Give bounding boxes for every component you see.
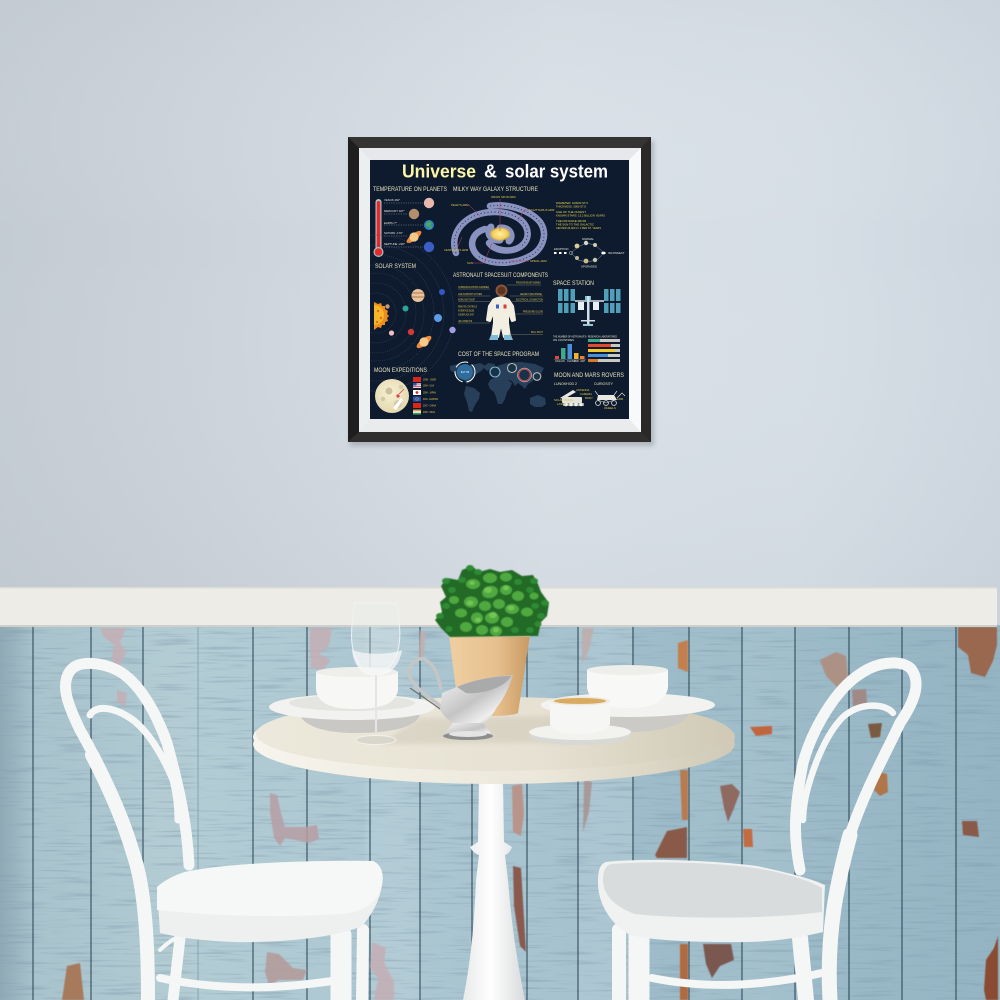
black frame (348, 137, 651, 442)
right callouts: BOLL BOOT (531, 330, 543, 334)
wood plank wainscot (0, 625, 1000, 1000)
heading: milky way: MILKY WAY GALAXY STRUCTURE (453, 186, 538, 193)
chair seat (157, 861, 383, 942)
rover callouts: SOLAR PANEL (554, 398, 574, 402)
rover names (554, 381, 613, 386)
flags and years: 2003 - EUROPE (423, 397, 438, 401)
galaxy callouts: SUN (467, 261, 473, 265)
flags and years: 1959 - USSR (423, 378, 436, 382)
panel: cost of the space program (450, 351, 546, 412)
chair legs and stretcher (619, 930, 822, 1000)
icon: astronaut (487, 284, 515, 340)
left callouts (458, 285, 490, 323)
panel: astronaut spacesuit components (453, 272, 548, 340)
white chair rail (0, 587, 997, 627)
flags and years: 2007 - CHINA (423, 404, 436, 408)
bar chart: UK (561, 359, 565, 363)
panel: moon expeditions (374, 367, 438, 415)
galaxy callouts: CENTAURUS ARM (444, 248, 469, 252)
rover names: CURIOSITY (594, 381, 613, 386)
icon: sun (374, 302, 389, 330)
flags and years (413, 377, 438, 415)
left callouts: LIFE SUPPORT SYSTEM (458, 292, 482, 296)
silver gravy boat (408, 659, 513, 740)
chair legs and stretcher (160, 930, 363, 1000)
heading: cost: COST OF THE SPACE PROGRAM (458, 351, 539, 358)
rover callouts: ANTENNA (576, 388, 589, 392)
rover callouts: LASER (557, 402, 566, 406)
green plant (435, 565, 549, 637)
horizontal bars (588, 339, 620, 362)
world map (450, 362, 546, 412)
paint peel patches (62, 627, 998, 1000)
table pedestal (463, 780, 525, 1000)
chart caption: THE NUMBER OF ASTRONAUTS / RESEARCH LABORATORIES (553, 334, 617, 338)
panel: astronauts bar chart (553, 334, 620, 363)
wine glass (352, 603, 402, 744)
panel: space station (553, 280, 620, 326)
rover callouts: CAMERA (580, 392, 592, 396)
title: solar system (505, 162, 608, 182)
left callouts: COMMUNICATIONS CARRIER (458, 285, 489, 289)
left chair (65, 663, 383, 1000)
rover callouts: BODY (585, 396, 593, 400)
chart caption (553, 336, 617, 341)
plant pot (449, 635, 530, 716)
left callouts: WORKLOAD TAUNET (458, 298, 475, 302)
rover names: LUNOKHOD 2 (554, 381, 578, 386)
heading: moon expeditions: MOON EXPEDITIONS (374, 367, 427, 374)
temperature labels (384, 198, 423, 247)
poster background (370, 160, 629, 419)
chart: spiral galaxy (454, 205, 544, 263)
title (403, 164, 607, 182)
title: & (484, 162, 497, 182)
text block: galaxy facts: KNOWN STARS: 13.2 BILLION YEARS (556, 214, 605, 218)
rover callouts (554, 388, 624, 410)
left callouts: INTERFACE ELBE (458, 308, 474, 312)
left callouts: REMOTE CONTROLS (458, 304, 477, 308)
left callouts: GUIDEPLACE UNIT (458, 312, 474, 316)
bar chart: USA (555, 359, 561, 363)
right plate and bowl (541, 665, 715, 732)
flags and years: 1990 - JAPAN (423, 390, 436, 394)
orbits (370, 234, 454, 392)
text block: galaxy facts: AGE OF THE OLDEST (556, 210, 586, 214)
icon: space station (558, 289, 620, 326)
diagram: galaxy evolution cycle: ERUPTION (554, 247, 568, 251)
text block: galaxy facts: THICKNESS: 3000 ST.S (556, 204, 586, 208)
galaxy callouts (444, 195, 555, 265)
right callouts: PRESSURE GLOVE (523, 310, 543, 314)
heading: rovers: MOON AND MARS ROVERS (554, 372, 624, 379)
left plate and bowl (269, 667, 435, 733)
diagram: galaxy evolution cycle: UPGRADED (581, 264, 597, 268)
white mat (359, 148, 641, 432)
temperature labels: NEPTUNE -218° (384, 242, 405, 246)
framed poster (348, 137, 656, 448)
right callouts: HELMET (BACKSIDE) (520, 292, 542, 296)
right callouts: PRESSURE HELMET ASSEMBLY (516, 280, 541, 284)
panel: moon and mars rovers (554, 372, 625, 410)
cost rings: $17.7B (461, 370, 469, 374)
flags and years: 2008 - INDIA (423, 410, 435, 414)
right callouts: ELECTRICAL CONNECTION (516, 298, 543, 302)
panel: solar system (370, 234, 456, 392)
title: Universe (402, 162, 476, 182)
bar chart: CHINA (567, 359, 576, 363)
galaxy callouts: SPIRAL ARM (530, 259, 547, 263)
coffee cup and saucer (529, 696, 631, 745)
rover callouts: WHEELS (604, 406, 616, 410)
diagram: galaxy evolution cycle: NORMAL (582, 237, 594, 241)
bar chart: IND (574, 359, 579, 363)
heading: solar system: SOLAR SYSTEM (375, 263, 416, 270)
chair seat (598, 860, 825, 942)
temperature labels: VENUS 462° (384, 198, 400, 202)
round table top (253, 697, 735, 784)
panel: temperature on planets (373, 186, 447, 257)
flags and years: 1964 - USA (423, 384, 434, 388)
rover callouts: ARM (617, 397, 624, 401)
text block: galaxy facts: THE SUN TO THE GALACTIC (556, 222, 594, 226)
text block: galaxy facts: CENTER 26,000 LY 1 PER ST. YEARS (556, 226, 601, 230)
icon: curiosity rover (595, 391, 625, 405)
galaxy callouts: SAGITTARIUS ARM (529, 208, 555, 212)
heading: temperature on planets: TEMPERATURE ON PLANETS (373, 186, 447, 193)
text block: galaxy facts (556, 201, 605, 230)
bar chart: JAP (580, 359, 585, 363)
right callouts (507, 280, 543, 334)
planets (405, 198, 434, 252)
right chair (598, 663, 916, 1000)
heading: space station: SPACE STATION (553, 280, 594, 287)
diagram: galaxy evolution cycle: INCONNECT (608, 251, 625, 255)
temperature labels: MERCURY 427° (384, 209, 405, 213)
galaxy callouts: ORION SPUR ARM (491, 195, 516, 199)
chair back hoops (795, 663, 916, 1000)
frame shadow (350, 141, 654, 446)
temperature labels: EARTH 7° (384, 221, 397, 225)
icon: moon (375, 379, 409, 413)
wall (0, 0, 1000, 590)
chart caption: ON COUNTRIES (553, 338, 574, 342)
text block: galaxy facts: DIAMETER: 100000 ST.S (556, 201, 588, 205)
heading: astronaut: ASTRONAUT SPACESUIT COMPONENTS (453, 272, 548, 279)
temperature labels: SATURN -170° (384, 231, 403, 235)
galaxy callouts: PELETS ARM (451, 203, 469, 207)
bar chart (554, 344, 586, 363)
panel: milky way galaxy structure (444, 186, 555, 265)
icon: thermometer (374, 199, 384, 257)
icon: lunokhod rover (560, 390, 584, 406)
chair back hoops (65, 663, 189, 1000)
diagram: galaxy evolution cycle (554, 237, 625, 268)
left callouts: LIFE CONNECTOR (458, 319, 472, 323)
text block: galaxy facts: THE DISTANCE FROM (556, 219, 587, 223)
planets orbiting the sun (385, 289, 456, 350)
